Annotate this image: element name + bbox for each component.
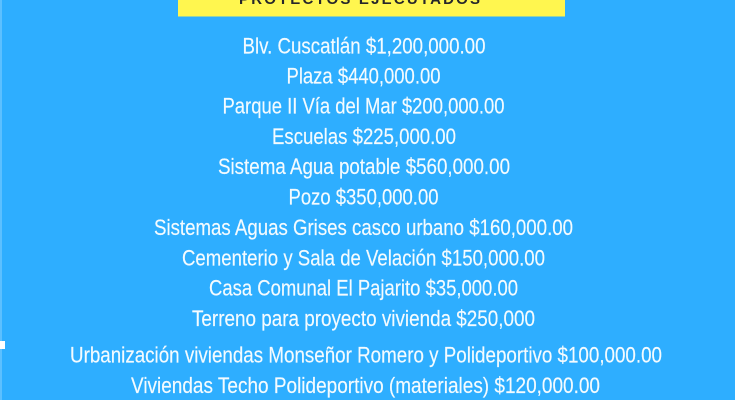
project: Blv. Cuscatlán: Blv. Cuscatlán $1,200,000.00 <box>242 34 486 58</box>
project: Pozo: Pozo $350,000.00 <box>288 184 438 210</box>
project: Plaza: Plaza $440,000.00 <box>286 64 440 88</box>
project: Casa Comunal El Pajarito: Casa Comunal El Pajarito $35,000.00 <box>209 276 518 300</box>
project: Escuelas: Escuelas $225,000.00 <box>272 124 456 149</box>
project: Viviendas Techo Polideportivo: Viviendas Techo Polideportivo (materiales) $120,000.00 <box>131 373 600 398</box>
project: Cementerio y Sala de Velación: Cementerio y Sala de Velación $150,000.00 <box>182 246 545 270</box>
project: Sistema Agua potable: Sistema Agua potable $560,000.00 <box>218 154 510 179</box>
project list <box>70 34 662 398</box>
project: Parque II Vía del Mar: Parque II Vía del Mar $200,000.00 <box>222 94 504 118</box>
project: Terreno para proyecto vivienda: Terreno para proyecto vivienda $250,000 <box>192 306 535 331</box>
heading banner <box>178 0 565 16</box>
project: Sistemas Aguas Grises: Sistemas Aguas Grises casco urbano $160,000.00 <box>154 215 573 240</box>
